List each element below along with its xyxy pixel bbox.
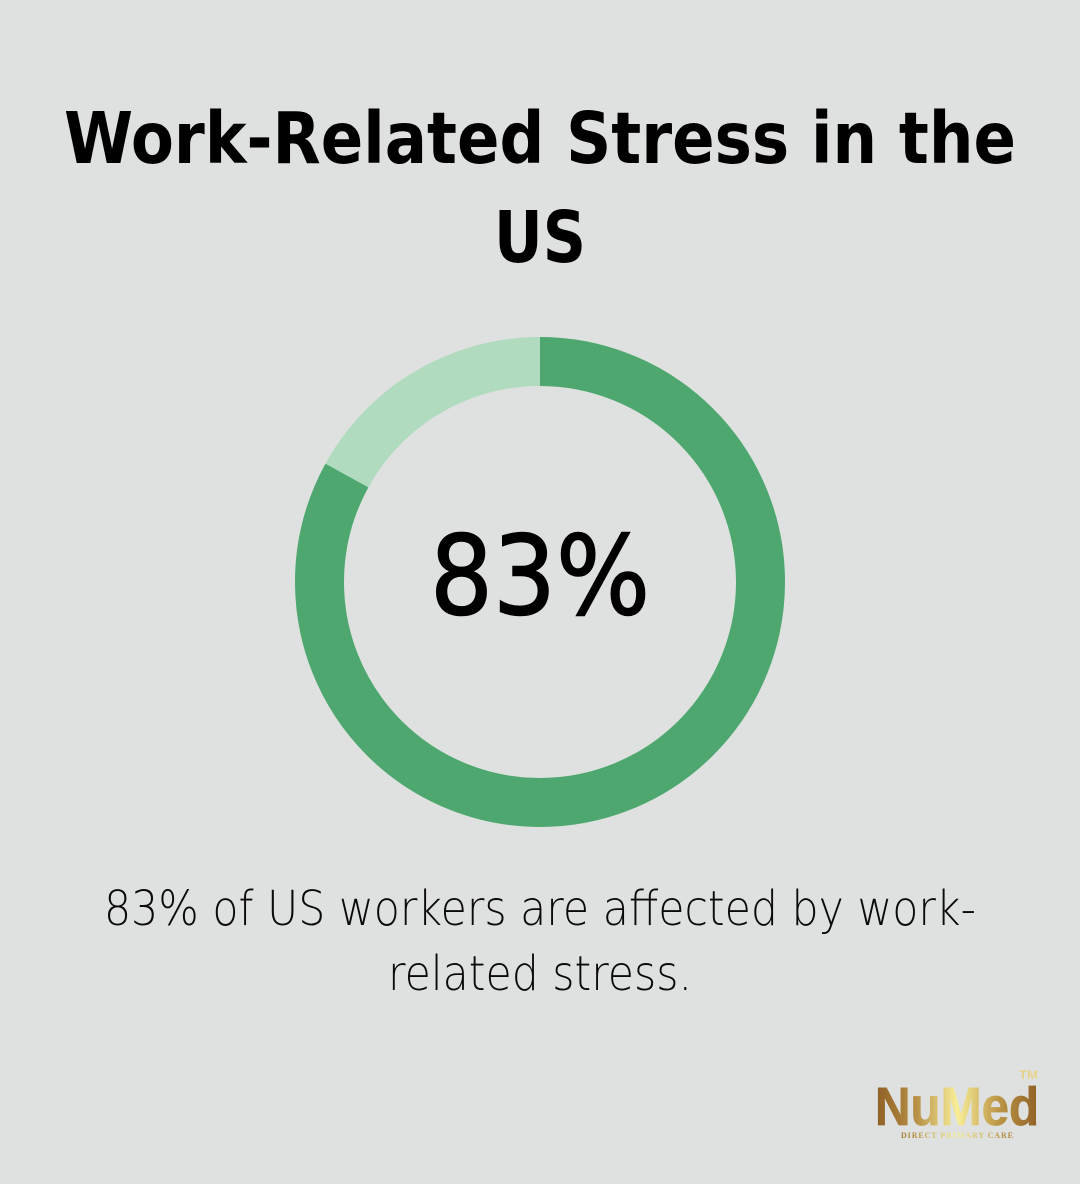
logo: NuMed <box>875 1068 1039 1140</box>
logo tagline: DIRECT PRIMARY CARE <box>901 1131 1013 1140</box>
description text: related stress. <box>388 946 692 1002</box>
logo wordmark: NuMed <box>875 1077 1039 1137</box>
title: US <box>494 196 586 279</box>
title <box>64 97 1016 279</box>
trademark: TM <box>1019 1068 1038 1082</box>
description text <box>104 881 976 1002</box>
remaining 17% segment <box>320 362 760 802</box>
donut chart: 83% <box>320 362 760 802</box>
83% segment <box>320 362 760 802</box>
center value: 83% <box>430 512 650 640</box>
description text: 83% of US workers are affected by work- <box>104 881 976 937</box>
